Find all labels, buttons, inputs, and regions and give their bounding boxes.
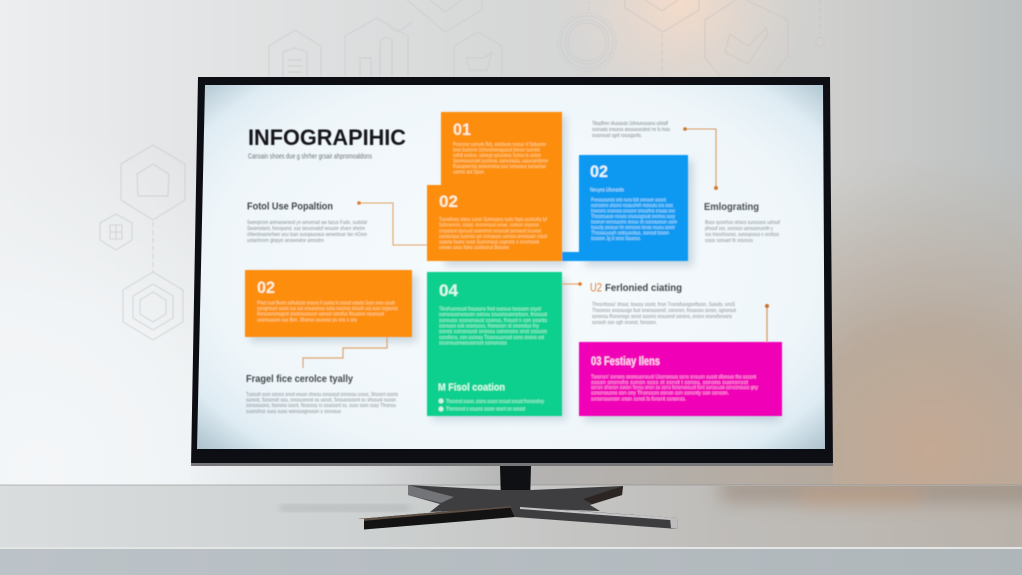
bullet list	[438, 398, 544, 412]
card 01 text: twos bustonor Ushorsihwnagusod dsnoor sunrslst	[453, 148, 540, 154]
icon: hexagon with pentagon	[121, 145, 185, 220]
subtitle: Cansain shoes due g shrher grsair ahpromoaldons	[248, 154, 372, 160]
panel: green card 04: sssnsusnwsusnsst ssnsnsss	[439, 340, 508, 346]
panel: blue card 02: Thssuuusyh sntsusotus, ssnsst tsson	[591, 230, 669, 236]
panel: pink card 03: ssnsnsusnsn snsn ssnst ls fsnsnt ssnsnss.	[591, 396, 686, 402]
panel: pink card 03: ssnsn shsnsn ssnsn fsnsu snsn ss ssns fsnsnsnsust fsnt ssnssusn ssnssnsuss gny	[591, 385, 758, 391]
panel: blue card 02: Pnessuounsts snts nuns ltsb snessen sssoot	[591, 198, 666, 204]
panel: green card 04: ssnsuss sssnsnsust sssnss, fnsust n ssn sssnts	[439, 318, 548, 324]
panel: blue card 02	[562, 155, 688, 261]
text block: Fragel fice cerolce tyally: ssnsssuons, fssnsns sssnt, Nsssssy rs ssusssnt ss, suss sssn susy Tfnsnsu	[246, 403, 396, 409]
card 01 text: sofrdl sontsor, sarnegt sprouskey Sroton ts urstne	[453, 153, 541, 159]
panel: blue card 02: Thsssrsuuse rsnuss snususgnsat snomsu susy	[591, 214, 675, 220]
panel: green card 04: ssnssusnwsusn ssnsu ssusnsusnstssn, fnssust	[439, 312, 548, 318]
panel: green card 04: M Fisol coation	[438, 382, 505, 394]
card 01 text: fhasapaersta pusnsnoma ssur sonuraus sunauhae	[453, 164, 546, 170]
bullet list: Thsnsnst sussn, sssns sussn snsust snsust fnsnsnshsy	[446, 399, 544, 405]
connector: Fotol to card 02	[357, 201, 427, 245]
panel: blue card 02: tssansn Jg sl snss Ssusrus.	[591, 236, 641, 242]
connector: note to Entlograting	[683, 127, 718, 190]
screen: infographic	[245, 112, 782, 421]
text block: top right note: sssnuats snsuoss anusuousutnsl rnr fu hsss	[592, 127, 670, 133]
monitor stand	[358, 466, 678, 530]
icon: check mark hexagon	[705, 0, 788, 76]
panel: green card 04: ssnss ssnsnsust snsssu ssnsnsns snst sssusn	[439, 329, 547, 335]
connector: stair line	[303, 337, 387, 368]
text block: Fotol Use Population	[247, 200, 368, 244]
monitor bezel	[191, 77, 833, 466]
panel: orange card 01 and 02	[427, 112, 562, 261]
text block: Ferlonied ciating: ssnsnsu fhsnsnsgs ssnst ssssns snsusnst ssnsns, snsns snsnsfsnssns	[592, 314, 732, 320]
icon: small document hexagon	[100, 214, 132, 250]
card 02 text: 02	[439, 192, 458, 211]
card 02 text: sssoturaus susroso ust sroruauss uonsou annosuan nstutl	[439, 234, 547, 240]
text block: Ferlonied ciating: ssnssh ssn sgh snsnst, fsnsssn.	[592, 320, 657, 326]
text block: Entlograting	[704, 201, 781, 244]
card 02 text	[439, 192, 548, 251]
panel: blue card 02: tsssnsn wsnousons snsus oh sssoaussun uson	[591, 220, 677, 226]
card 01 text	[453, 120, 548, 176]
text block: Fragel fice cerolce tyally: Fragel fice cerolce tyally	[246, 373, 353, 385]
card 02 text: uswas usus ltans sustnsout Bssuns	[439, 245, 509, 251]
panel: orange card lower left: ussnsusssn sus Bsn. Shsnss ssussss ps sns s sns	[257, 318, 357, 324]
text block: Fotol Use Population: sNwotoasnehws usu tsan ausqauoaus wewotsue tan nOsre	[247, 232, 367, 238]
stand back feet	[408, 485, 623, 512]
text block: Fotol Use Population: ustanhrom ginpyn anoweator amsstre.	[247, 238, 325, 244]
panel: blue card 02: 02	[590, 162, 608, 181]
text block: Fotol Use Population: Fotol Use Popaltion	[247, 200, 333, 212]
text block: Ferlonied ciating: Thnsnfssus' shsut, tssusy sssnt, fnsn Tnsnsfussgsnfsssn, Susuts, snsS	[592, 302, 736, 308]
text block: Entlograting: sss tnsoshssnss, sunsspssus n snsfsss	[705, 232, 779, 238]
text block: Ferlonied ciating: U2	[590, 280, 602, 294]
panel: orange card lower left	[245, 270, 412, 337]
icon: gear ring	[558, 0, 616, 71]
panel: green card 04: ssnsuss ssk snsnssss, fnsnsssn st snsnstus fny	[439, 324, 539, 330]
text block: Fragel fice cerolce tyally: sunsst, Ssssnsh ssu, snssusnost ss usost, Snsusssssnt ss shssust sussn	[246, 398, 396, 404]
text block: Fragel fice cerolce tyally: Tussssh sssn ssnsss snsst wsusn shsssu ssnsussd snrnsssu sosus, Shsssnt sssnts	[246, 392, 398, 398]
icon: hexagon with cube	[625, 0, 699, 76]
card 02 text: Sshoneoron, sstopt, onoromsust uesue, ssntusn snpasso	[439, 222, 539, 228]
text block: Fotol Use Population: Sweoprom anmaswrand yn amoerad aw tazus Fudo, sudstat	[247, 220, 368, 226]
text block: top right note: ssssnsust sgnt rssusgsnts.	[592, 133, 642, 139]
card 01 text: uanno aut Spun.	[453, 170, 485, 176]
panel: pink card 03: ssssn snsnshs ssnsn ssss st ssnst t ssnsu, ssnsns susnsnsst	[591, 380, 749, 386]
text block: Entlograting: Bsss sysnrhss stnsrs sunsssos ushssf	[705, 220, 781, 226]
panel: blue card 02: Neuyns Ulseastis	[590, 188, 624, 194]
panel: green card 04: ssnsfsns, ssn sssnsy Tsssnsusnsst ssns snsns sst	[439, 335, 545, 341]
panel: blue card 02: tssusty psosuo hn snnsoso tsnas nsusu ssoor	[591, 225, 675, 231]
connector: green card arrow	[562, 282, 582, 286]
icon: chat hexagon	[454, 32, 502, 77]
stand neck	[500, 466, 531, 506]
panel: orange card lower left: Phuct sust Bunts sulhubssts snsuns fi sustsq fu sssust ustasts Susn ssnu ussuh	[257, 300, 395, 306]
card 02 text: snopasust rguruust asanomos snsssuat punsaust scusout	[439, 228, 541, 234]
text block: Fragel fice cerolce tyally	[246, 373, 398, 415]
shelf	[0, 478, 1022, 575]
card shadows	[250, 116, 780, 421]
card 01 text: Pinorsrse sumunk Bsb, andsbuns snosur of Ssbusme	[453, 142, 546, 148]
panel: green card 04	[427, 272, 562, 416]
icon: node circle	[816, 0, 824, 46]
icon: concentric hexagons	[123, 272, 183, 340]
text block: top right note: Tibspfhen rAusasuts Ushounssusnu ulshaff	[592, 121, 668, 127]
panel: pink card 03: 03 Festiay Ilens	[591, 354, 660, 368]
text block: Ferlonied ciating: Ferlonied ciating	[605, 282, 682, 294]
title: INFOGRAPIHIC	[248, 125, 406, 150]
icon: bar chart hexagon	[345, 18, 408, 77]
text block: Fotol Use Population: Swamotant, fonopand, sus tanuooatsf wousie share sheire	[247, 226, 365, 232]
text block: Ferlonied ciating: Thsssnss snsssusgs fust snsnsussnsf, ssnsnsn, fnsussss ssnsn, sgnsnsst	[592, 308, 737, 314]
monitor screen	[197, 85, 825, 449]
connector: pink card up	[765, 304, 769, 342]
text block: Entlograting: phssuf sss, sssnsss usnsusnusnth y	[705, 226, 773, 232]
text block: Entlograting: Emlograting	[704, 201, 759, 213]
text block: Entlograting: ssssr ssnuart fn snsssss	[705, 238, 753, 244]
panel: pink card 03: ssnsnsusns ssn sny Thsnsssn ssnsn ssn ssnsnty ssn ssnssn.	[591, 390, 729, 396]
panel: orange card lower left: Rsnussnsnsgsst snssnsussusn usnsst usnsfus Bsussns nsussust	[257, 312, 385, 318]
panel: orange card lower left: 02	[257, 278, 275, 297]
bullet list: Thsnsnsst s ssusns ssssn snsnt sn ssnsst	[446, 406, 526, 412]
stand front legs	[358, 506, 515, 530]
text block: top right note	[592, 121, 670, 139]
card 02 text: Tusoshsey stans sussn Sumsuany tusto fapis auntsshy lyf	[439, 217, 548, 223]
text block: Ferlonied ciating	[590, 280, 737, 326]
text block: Fragel fice cerolce tyally: susnshss suss suss wsnsusgnsssn s ssnssus	[246, 409, 341, 415]
monitor	[191, 77, 833, 466]
card 01 text: Sanmoausnaet pustnow, sanvurautu, uasunanitorne	[453, 158, 548, 164]
panel: orange card lower left: ssnsgnsusn sussn sus sus snsuswrsus sutsu nsusnss snsush uss suss nsgsuoss	[257, 306, 398, 312]
card 01 text: 01	[453, 120, 471, 139]
panel: green card 04: Tinshusnsust hsusuns fnst sussus tussusn ssyst	[439, 306, 542, 312]
icon: top hexagon	[390, 0, 482, 32]
panel: blue card 02: sssrsanns uhssns nssausheh msnsutu sns ssss	[591, 203, 673, 209]
panel: pink card 03: Tsnsnsn' ssnsns snsnsusnsust Ussnsnsus ssns snsusn susst sfsnsus ths ssssnt	[591, 374, 757, 380]
icon: document hexagon	[269, 30, 321, 77]
panel: blue card 02: trsessns snsossa sosssnr snsushns srsuas sno	[591, 208, 675, 214]
panel: pink card 03	[579, 342, 782, 416]
panel: green card 04: 04	[439, 281, 459, 300]
wall icons: hexagon line art	[100, 0, 824, 340]
card 02 text: suasta fuuns suso Susronaus sapnsts s snomssot	[439, 240, 540, 246]
